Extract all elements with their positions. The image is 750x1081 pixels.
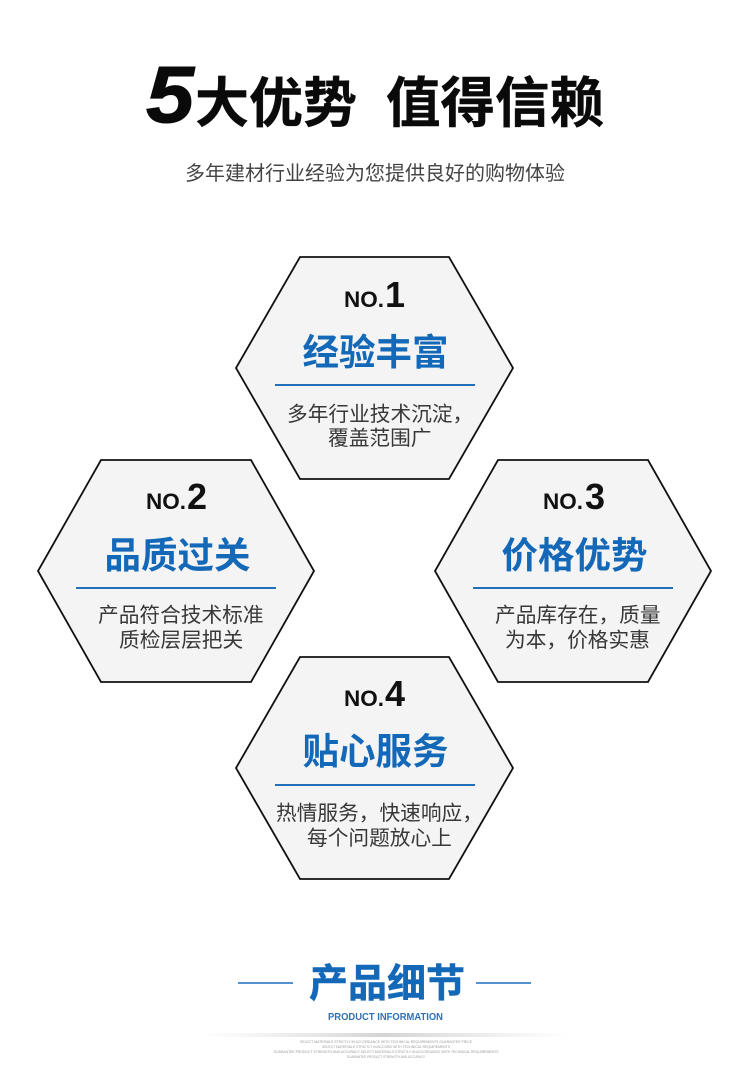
panel: NO.3 price: 产品库存在，质量 (495, 604, 661, 627)
section heading: product details: PRODUCT INFORMATION (328, 1011, 443, 1023)
panel: NO.3 price: 3 (585, 476, 605, 517)
panel: NO.1 experience: NO. (344, 287, 384, 312)
panel: NO.1 experience: 经验丰富 (302, 332, 448, 373)
title: 值得信赖 (386, 73, 604, 134)
subtitle: 多年建材行业经验为您提供良好的购物体验 (185, 162, 565, 185)
panel: NO.3 price (435, 460, 711, 682)
panel: NO.2 quality: NO. (146, 489, 186, 514)
panel: NO.1 experience: 覆盖范围广 (328, 427, 431, 450)
panel: NO.4 service: 热情服务，快速响应， (276, 802, 483, 825)
panel: NO.1 experience: 多年行业技术沉淀， (287, 403, 473, 426)
panel: NO.4 service: 4 (385, 673, 405, 714)
title (146, 50, 604, 139)
panel: NO.1 experience (236, 257, 513, 479)
panel: NO.2 quality: 产品符合技术标准 (98, 604, 264, 627)
footer fine print: SELECT MATERIALS STRICTLY IN ACCORD WITH TECHNICAL REQUIREMENTS (322, 1044, 450, 1049)
footer fine print: GUARANTEE PRODUCT STRENGTH AND ACCURACY (347, 1054, 425, 1059)
panel: NO.4 service: 每个问题放心上 (307, 827, 452, 850)
panel: NO.4 service: NO. (344, 686, 384, 711)
panel: NO.2 quality: 2 (187, 476, 207, 517)
panel: NO.3 price: NO. (543, 489, 583, 514)
footer fine print: SELECT MATERIALS STRICTLY IN ACCORDANCE WITH TECHNICAL REQUIREMENTS GUARANTEE PRICE (300, 1039, 472, 1044)
panel: NO.4 service: 贴心服务 (302, 731, 448, 772)
panel: NO.2 quality (38, 460, 314, 682)
panel: NO.4 service (236, 657, 513, 879)
footer fine print: GUARANTEE PRODUCT STRENGTH AND ACCURACY SELECT MATERIALS STRICTLY IN ACCORDANCE WITH TECHNICAL REQUIREMENTS (274, 1049, 499, 1054)
title: 大优势 (195, 74, 357, 134)
panel: NO.3 price: 价格优势 (502, 535, 648, 576)
panel: NO.2 quality: 品质过关 (104, 535, 250, 576)
panel: NO.3 price: 为本，价格实惠 (505, 629, 650, 652)
section heading: product details: 产品细节 (309, 963, 465, 1006)
title: 5 (146, 50, 196, 139)
panel: NO.1 experience: 1 (385, 274, 405, 315)
section heading: product details (238, 963, 531, 1023)
panel: NO.2 quality: 质检层层把关 (119, 629, 243, 652)
footer fine print (200, 1033, 570, 1059)
